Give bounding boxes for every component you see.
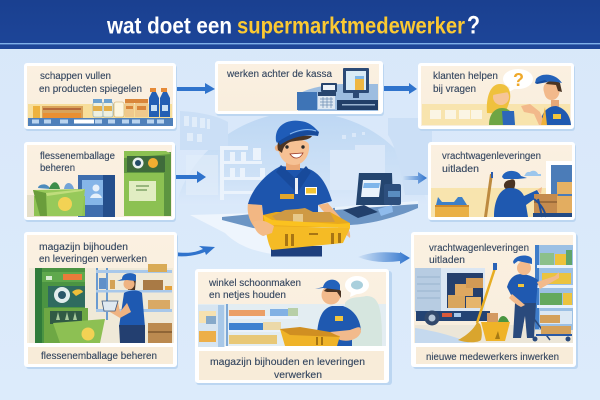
text: winkel schoonmaken: winkel schoonmaken	[208, 278, 301, 289]
text: magazijn bijhouden en leveringen: magazijn bijhouden en leveringen	[210, 357, 365, 368]
cash register illustration	[297, 68, 378, 111]
panel: flessenemballage beheren	[24, 142, 176, 222]
store shelves and worker illustration	[198, 276, 386, 347]
text: vrachtwagenleveringen: vrachtwagenleveringen	[429, 243, 529, 254]
title: wat doet een	[106, 12, 232, 38]
panel: winkel schoonmaken	[195, 269, 392, 385]
text: magazijn bijhouden: magazijn bijhouden	[39, 242, 128, 253]
register terminal	[343, 173, 401, 218]
title: ?	[467, 12, 480, 40]
text: en producten spiegelen: en producten spiegelen	[39, 84, 142, 95]
worker arms	[248, 203, 350, 238]
floor and counter	[190, 201, 418, 254]
panel: werken achter de kassa	[215, 61, 384, 116]
panel: vrachtwagenleveringen uitladen top	[428, 142, 576, 222]
unloading illustration	[431, 161, 572, 217]
shopping basket	[253, 208, 350, 250]
arrow: panel 4 to centre	[175, 171, 206, 183]
text: bij vragen: bij vragen	[433, 84, 476, 95]
text: flessenemballage: flessenemballage	[40, 151, 115, 162]
text: nieuwe medewerkers inwerken: nieuwe medewerkers inwerken	[426, 352, 559, 363]
worker collar	[276, 165, 311, 192]
arrow: panel 2 to 3	[382, 83, 417, 94]
text: schappen vullen: schappen vullen	[40, 71, 111, 82]
header band	[0, 0, 600, 49]
title: supermarktmedewerker	[237, 12, 465, 38]
central background scene	[176, 111, 432, 205]
recycling machine illustration	[27, 151, 171, 217]
shelf products illustration	[28, 88, 173, 126]
panel: nieuwe medewerkers inwerken	[411, 232, 578, 369]
truck, mop and worker illustration	[415, 245, 573, 343]
customer and worker illustration	[422, 69, 571, 125]
warehouse illustration	[29, 264, 173, 343]
title	[106, 12, 480, 40]
worker cap	[276, 121, 319, 143]
text: flessenemballage beheren: flessenemballage beheren	[41, 351, 157, 362]
text: uitladen: uitladen	[442, 164, 479, 175]
panel: klanten helpen	[418, 63, 575, 131]
text: vrachtwagenleveringen: vrachtwagenleveringen	[442, 151, 541, 162]
arrow: centre to panel 8	[358, 252, 410, 264]
arrow: panel 1 to 2	[176, 83, 215, 94]
arrow: centre to panel 5	[402, 172, 427, 184]
worker neck and face	[286, 158, 300, 170]
worker trousers	[271, 246, 322, 256]
panel: magazijn bijhouden	[24, 232, 178, 369]
text: uitladen: uitladen	[429, 255, 465, 266]
text: beheren: beheren	[40, 163, 75, 174]
text: klanten helpen: klanten helpen	[433, 71, 498, 82]
text: en leveringen verwerken: en leveringen verwerken	[39, 254, 147, 265]
text: verwerken: verwerken	[274, 370, 322, 381]
customer and worker illustration: ?	[513, 70, 524, 90]
arrow: panel 6 to centre	[174, 246, 215, 256]
text: en netjes houden: en netjes houden	[209, 290, 286, 301]
text: werken achter de kassa: werken achter de kassa	[226, 69, 332, 80]
central worker	[248, 121, 350, 256]
panel: schappen vullen	[24, 63, 177, 131]
worker shirt	[248, 166, 332, 222]
